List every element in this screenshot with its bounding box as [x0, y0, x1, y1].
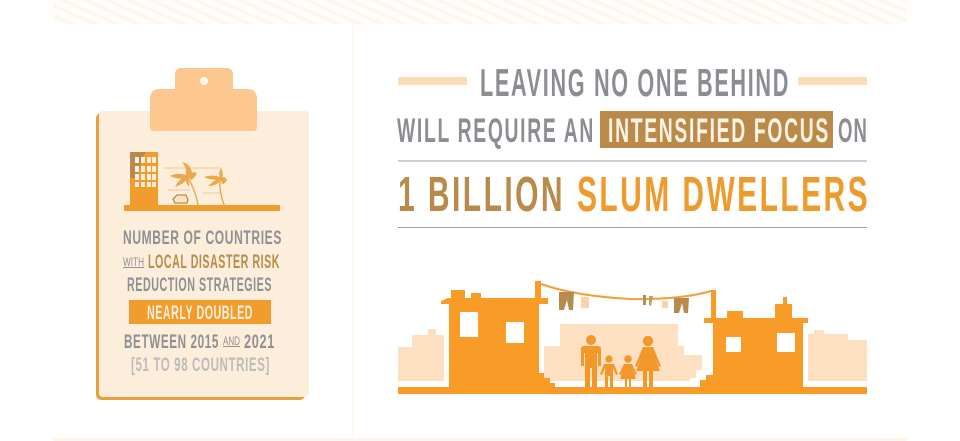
figure: boy [600, 355, 618, 387]
panel: clipboard [96, 68, 309, 400]
top striped band [53, 0, 907, 24]
text: between 2015 and 2021: 2021 [244, 331, 275, 353]
left house [441, 281, 555, 387]
ground [398, 387, 867, 394]
right house [700, 290, 808, 387]
text: with [123, 255, 144, 269]
icon: storm building and palms [124, 152, 280, 211]
heading: will require an intensified focus on: ON [838, 112, 868, 150]
text: between 2015 and 2021: AND [223, 334, 240, 348]
bottom band [53, 438, 907, 441]
text: number of countries: NUMBER OF COUNTRIES [123, 227, 282, 249]
text: reduction strategies: REDUCTION STRATEGIES [127, 274, 272, 296]
heading: leaving no one behind [398, 62, 867, 105]
text: 51 to 98 countries: [51 TO 98 COUNTRIES] [131, 354, 270, 376]
text: local disaster risk: LOCAL DISASTER RISK [148, 251, 280, 273]
heading: 1 billion slum dwellers: 1 BILLION [398, 168, 565, 222]
figure: girl [619, 355, 637, 387]
callout: nearly doubled [129, 300, 271, 324]
callout: nearly doubled: NEARLY DOUBLED [147, 302, 253, 324]
vertical divider [352, 24, 354, 438]
figure: woman [635, 336, 661, 387]
heading: will require an intensified focus on: WILL REQUIRE AN [397, 112, 595, 150]
background buildings [398, 329, 444, 381]
illustration: slum scene [398, 281, 867, 394]
figure: man [581, 335, 601, 387]
text: with: WITH [123, 255, 144, 269]
heading: 1 billion slum dwellers [398, 168, 870, 222]
text: number of countries [123, 227, 282, 296]
family figures [581, 335, 661, 387]
text: between 2015 and 2021: BETWEEN 2015 [124, 331, 219, 353]
clothes line with laundry [541, 284, 711, 313]
icon: clipboard clip [150, 68, 257, 131]
